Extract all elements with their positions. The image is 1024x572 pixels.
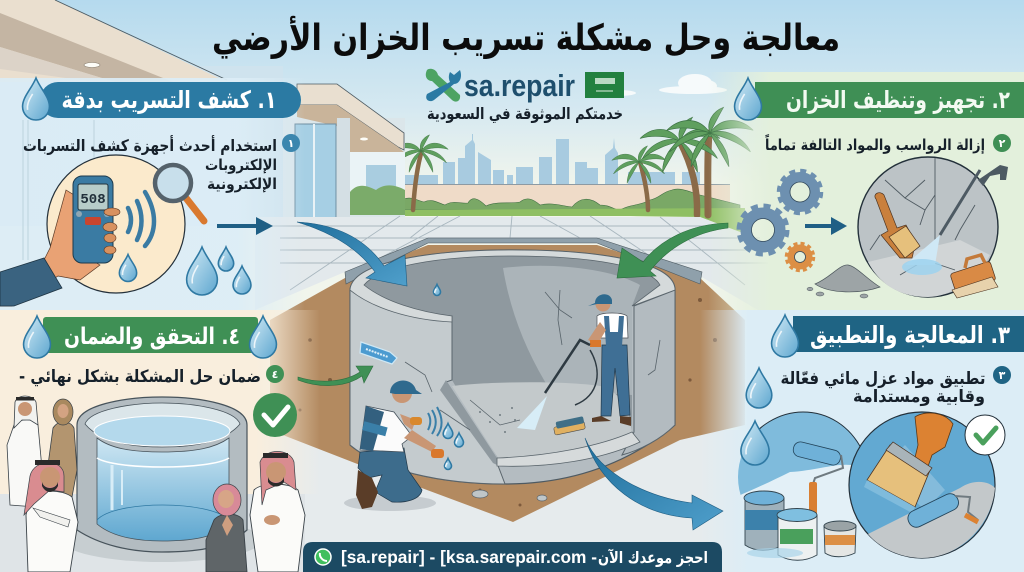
tagline: خدمتكم الموثوقة في السعودية xyxy=(427,104,623,124)
city skyline xyxy=(405,134,700,184)
text: detection devices: استخدام أحدث أجهزة كشف التسربات xyxy=(23,135,277,155)
text: final solution: ضمان حل المشكلة بشكل نهائي - xyxy=(19,367,261,387)
excavation soil xyxy=(270,238,745,522)
logo xyxy=(426,68,624,124)
logo wordmark: sa.repair xyxy=(464,68,575,103)
man front right xyxy=(250,452,305,572)
falling water drops xyxy=(433,284,463,470)
worker with pressure washer xyxy=(517,294,631,430)
text: detection devices xyxy=(23,135,277,193)
patio tiles xyxy=(255,216,775,320)
text: remove sediment: إزالة الرواسب والمواد التالفة تماماً xyxy=(765,134,985,154)
bullet 3 xyxy=(993,366,1011,384)
icon: detector circle: 508 xyxy=(80,192,106,208)
title: معالجة وحل مشكلة تسريب الخزان الأرضي xyxy=(212,15,840,59)
bullet 1 xyxy=(282,134,300,152)
icon: roller and cans circle xyxy=(738,412,860,514)
bullet 2 xyxy=(993,134,1011,152)
icon: Saudi flag xyxy=(585,72,624,98)
panel 2 background xyxy=(708,72,1024,310)
arrow xyxy=(805,217,847,235)
heading 1: ١. كشف التسريب بدقة xyxy=(62,86,276,114)
icon: water tank xyxy=(62,397,262,562)
bullet 4 xyxy=(266,365,284,383)
people group xyxy=(7,396,305,572)
bottom call-to-action bar xyxy=(303,542,722,572)
man back left xyxy=(7,396,43,507)
clouds xyxy=(600,74,727,96)
tank label tag xyxy=(360,342,397,364)
icon: WhatsApp xyxy=(315,549,331,565)
bullet 3: ٣ xyxy=(999,369,1006,382)
icon: magnifier xyxy=(155,165,204,221)
palm trees xyxy=(394,107,753,215)
panel 4 ground xyxy=(0,494,305,572)
icon: wrench and spanner xyxy=(426,69,461,102)
panel 3 background xyxy=(700,310,1024,572)
icon: brush and roller circle xyxy=(849,412,995,558)
building xyxy=(0,0,405,226)
heading 4 xyxy=(24,316,276,358)
icon: drops xyxy=(746,368,772,408)
arrow xyxy=(217,217,273,235)
lower ground floor xyxy=(250,430,750,572)
icon: cracked wall circle xyxy=(858,157,1008,297)
arrow: tank to panel 3 xyxy=(585,438,723,530)
woman back xyxy=(48,399,77,497)
arrow: panel 1 to tank xyxy=(297,222,407,286)
contact text: [sa.repair] - [ksa.sarepair.com - xyxy=(341,547,597,567)
panel 2: preparation and cleaning xyxy=(735,78,1024,298)
text: waterproof materials: وقابية ومستدامة xyxy=(853,387,985,407)
panel 3: treatment and application xyxy=(738,315,1024,560)
icon: check badge xyxy=(965,415,1005,455)
arrow: panel 2 to tank xyxy=(617,223,728,278)
icon: gears xyxy=(739,171,821,270)
worker inspecting leak xyxy=(344,381,444,511)
bushes xyxy=(404,189,740,210)
icon: detector circle xyxy=(0,155,185,306)
panel 4: verification and guarantee xyxy=(7,316,305,572)
woman front xyxy=(206,484,247,572)
icon: gravel pile xyxy=(807,265,880,298)
lawn xyxy=(404,208,745,234)
heading 4: ٤. التحقق والضمان xyxy=(64,324,240,350)
bullet 2: ٢ xyxy=(999,137,1006,150)
heading 2 xyxy=(735,78,1024,120)
garden wall xyxy=(400,184,730,211)
bullet 1: ١ xyxy=(288,137,294,150)
text: detection devices: الإلكترونية xyxy=(207,175,277,193)
heading 3 xyxy=(772,315,1024,357)
icon: check badge xyxy=(253,393,297,437)
underground tank xyxy=(350,250,675,484)
icon: scrub brush xyxy=(950,255,998,298)
call to action: احجز موعدك الآن xyxy=(598,548,708,567)
man front left xyxy=(24,460,78,572)
icon: paint cans xyxy=(744,491,856,560)
panel 1 background xyxy=(0,78,305,310)
text: waterproof materials xyxy=(780,369,986,407)
icon: drops xyxy=(187,247,251,295)
text: waterproof materials: تطبيق مواد عزل مائي فعّالة xyxy=(780,369,986,389)
text: detection devices: الإلكتروبات xyxy=(205,156,277,174)
panel 1: leak detection xyxy=(0,78,301,306)
panel 4 background xyxy=(0,310,320,494)
heading 1 xyxy=(23,78,301,120)
bullet 4: ٤ xyxy=(272,368,278,381)
scrub brush on floor xyxy=(554,416,586,435)
arrow: tank to panel 4 xyxy=(298,366,373,386)
